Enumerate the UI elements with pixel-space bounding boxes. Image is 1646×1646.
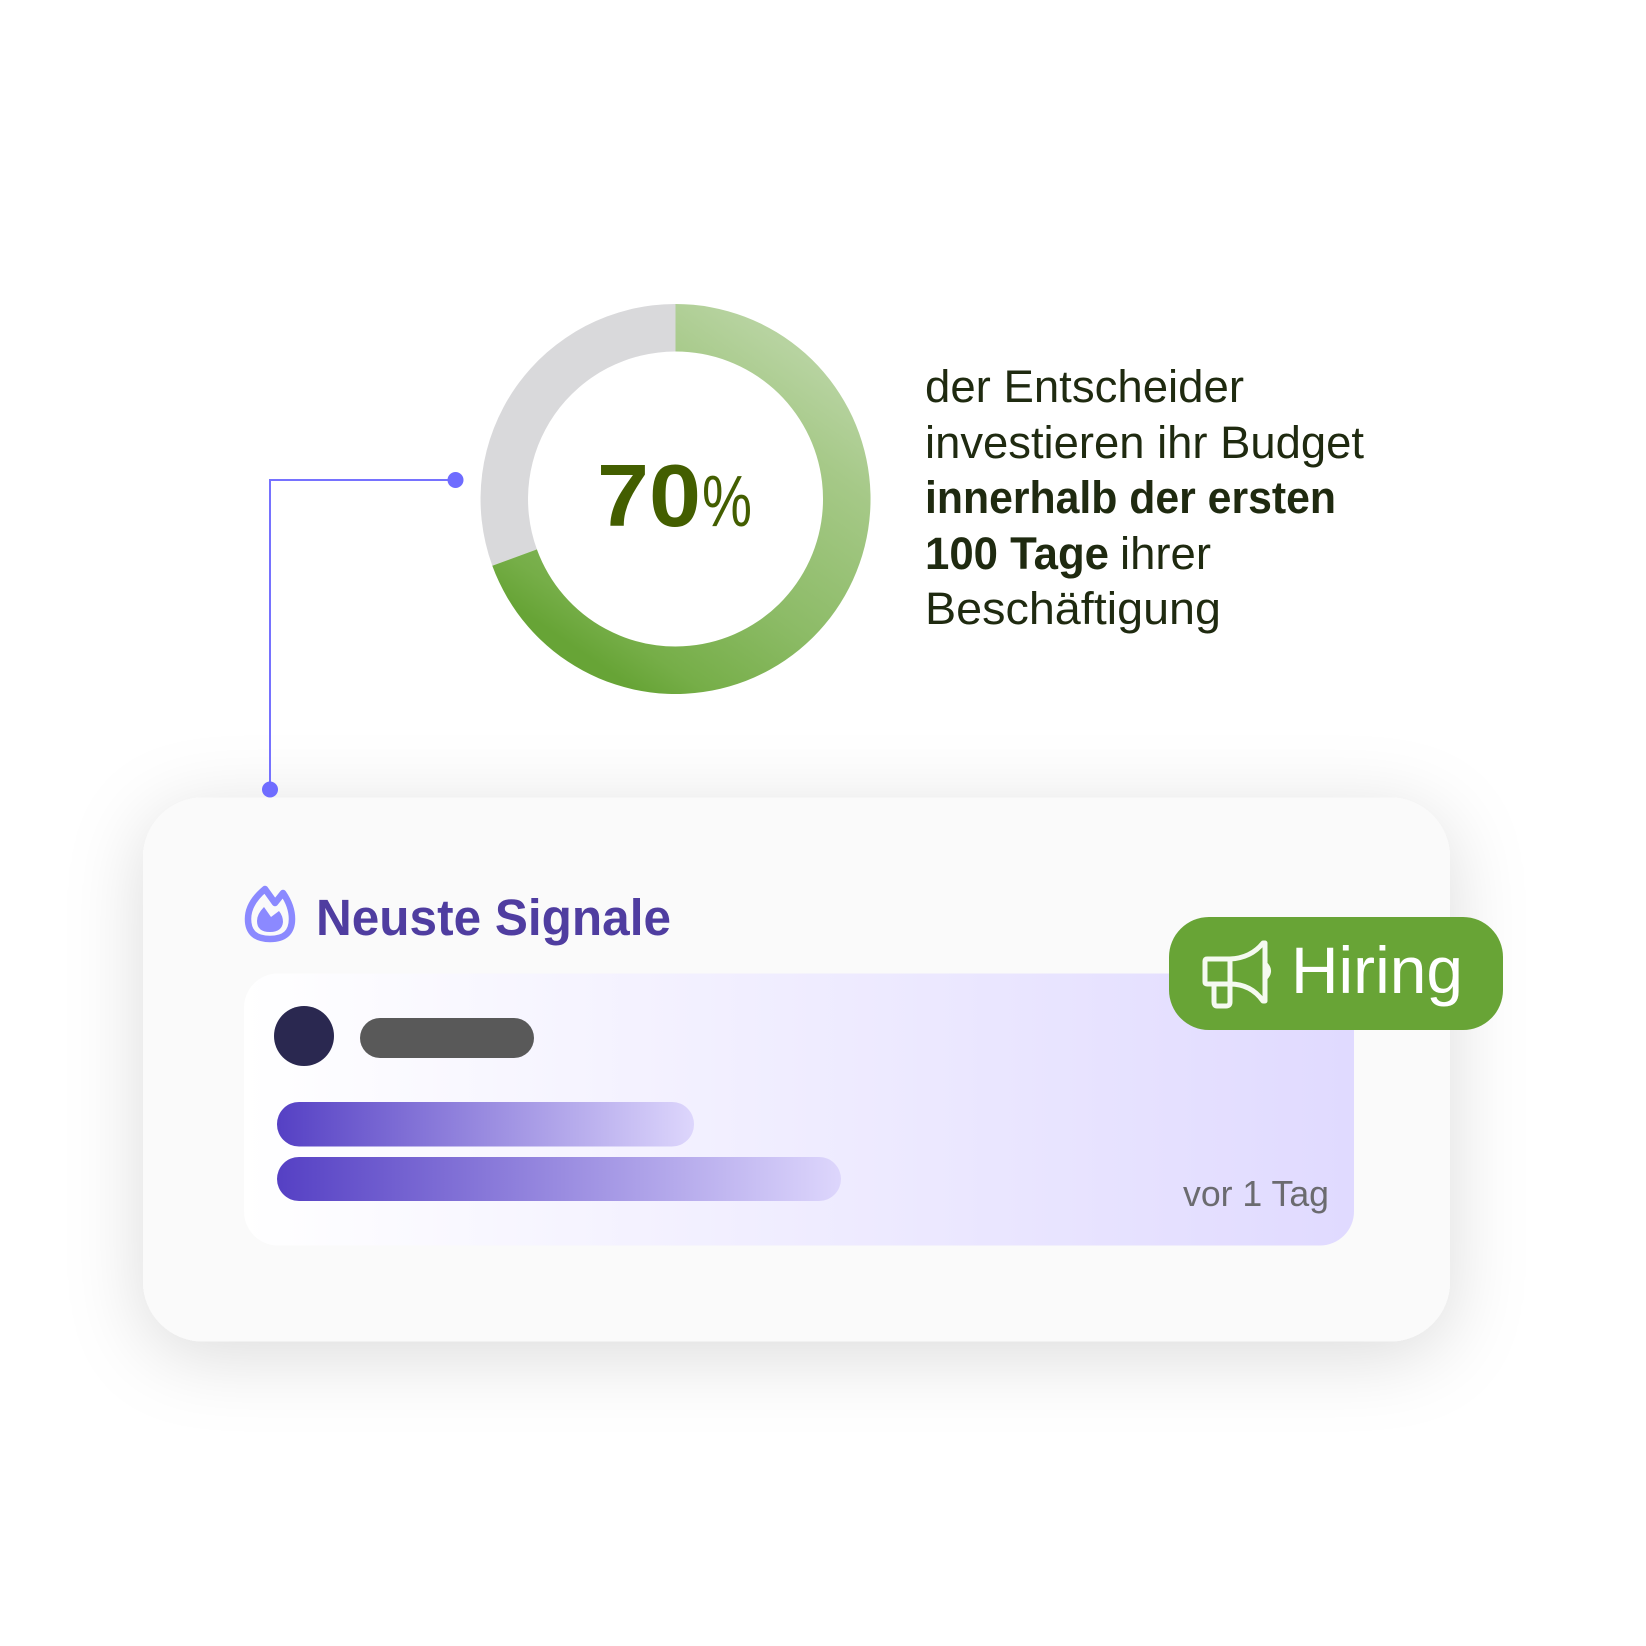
donut label: 70%: % bbox=[702, 462, 752, 542]
statistic description text: investieren ihr Budget bbox=[925, 417, 1364, 468]
connector line with dots bbox=[262, 472, 464, 798]
timestamp: vor 1 Tag bbox=[1183, 1173, 1329, 1214]
avatar circle bbox=[274, 1006, 334, 1066]
donut label: 70% bbox=[597, 446, 752, 545]
statistic description text: ihrer bbox=[1120, 528, 1211, 579]
statistic description text bbox=[925, 361, 1364, 634]
donut value: 70% green bbox=[492, 304, 871, 694]
badge label: Hiring bbox=[1291, 933, 1463, 1007]
statistic description text: Beschäftigung bbox=[925, 583, 1221, 634]
card: Neuste Signale bbox=[143, 798, 1450, 1342]
name placeholder pill bbox=[360, 1018, 534, 1058]
donut remainder: gray bbox=[481, 304, 676, 566]
donut label: 70%: 70 bbox=[597, 446, 701, 545]
panel: signal row bbox=[244, 974, 1354, 1246]
text placeholder bar 1 bbox=[277, 1102, 694, 1146]
icon: megaphone bbox=[1205, 943, 1268, 1006]
icon: flame bbox=[248, 889, 292, 939]
statistic description text: innerhalb der ersten bbox=[925, 472, 1336, 523]
statistic description text: der Entscheider bbox=[925, 361, 1244, 412]
badge: Hiring bbox=[1169, 917, 1503, 1030]
donut chart bbox=[481, 304, 871, 694]
statistic description text: 100 Tage bbox=[925, 528, 1109, 579]
heading: Neuste Signale: Neuste Signale bbox=[316, 889, 671, 946]
text placeholder bar 2 bbox=[277, 1157, 841, 1201]
